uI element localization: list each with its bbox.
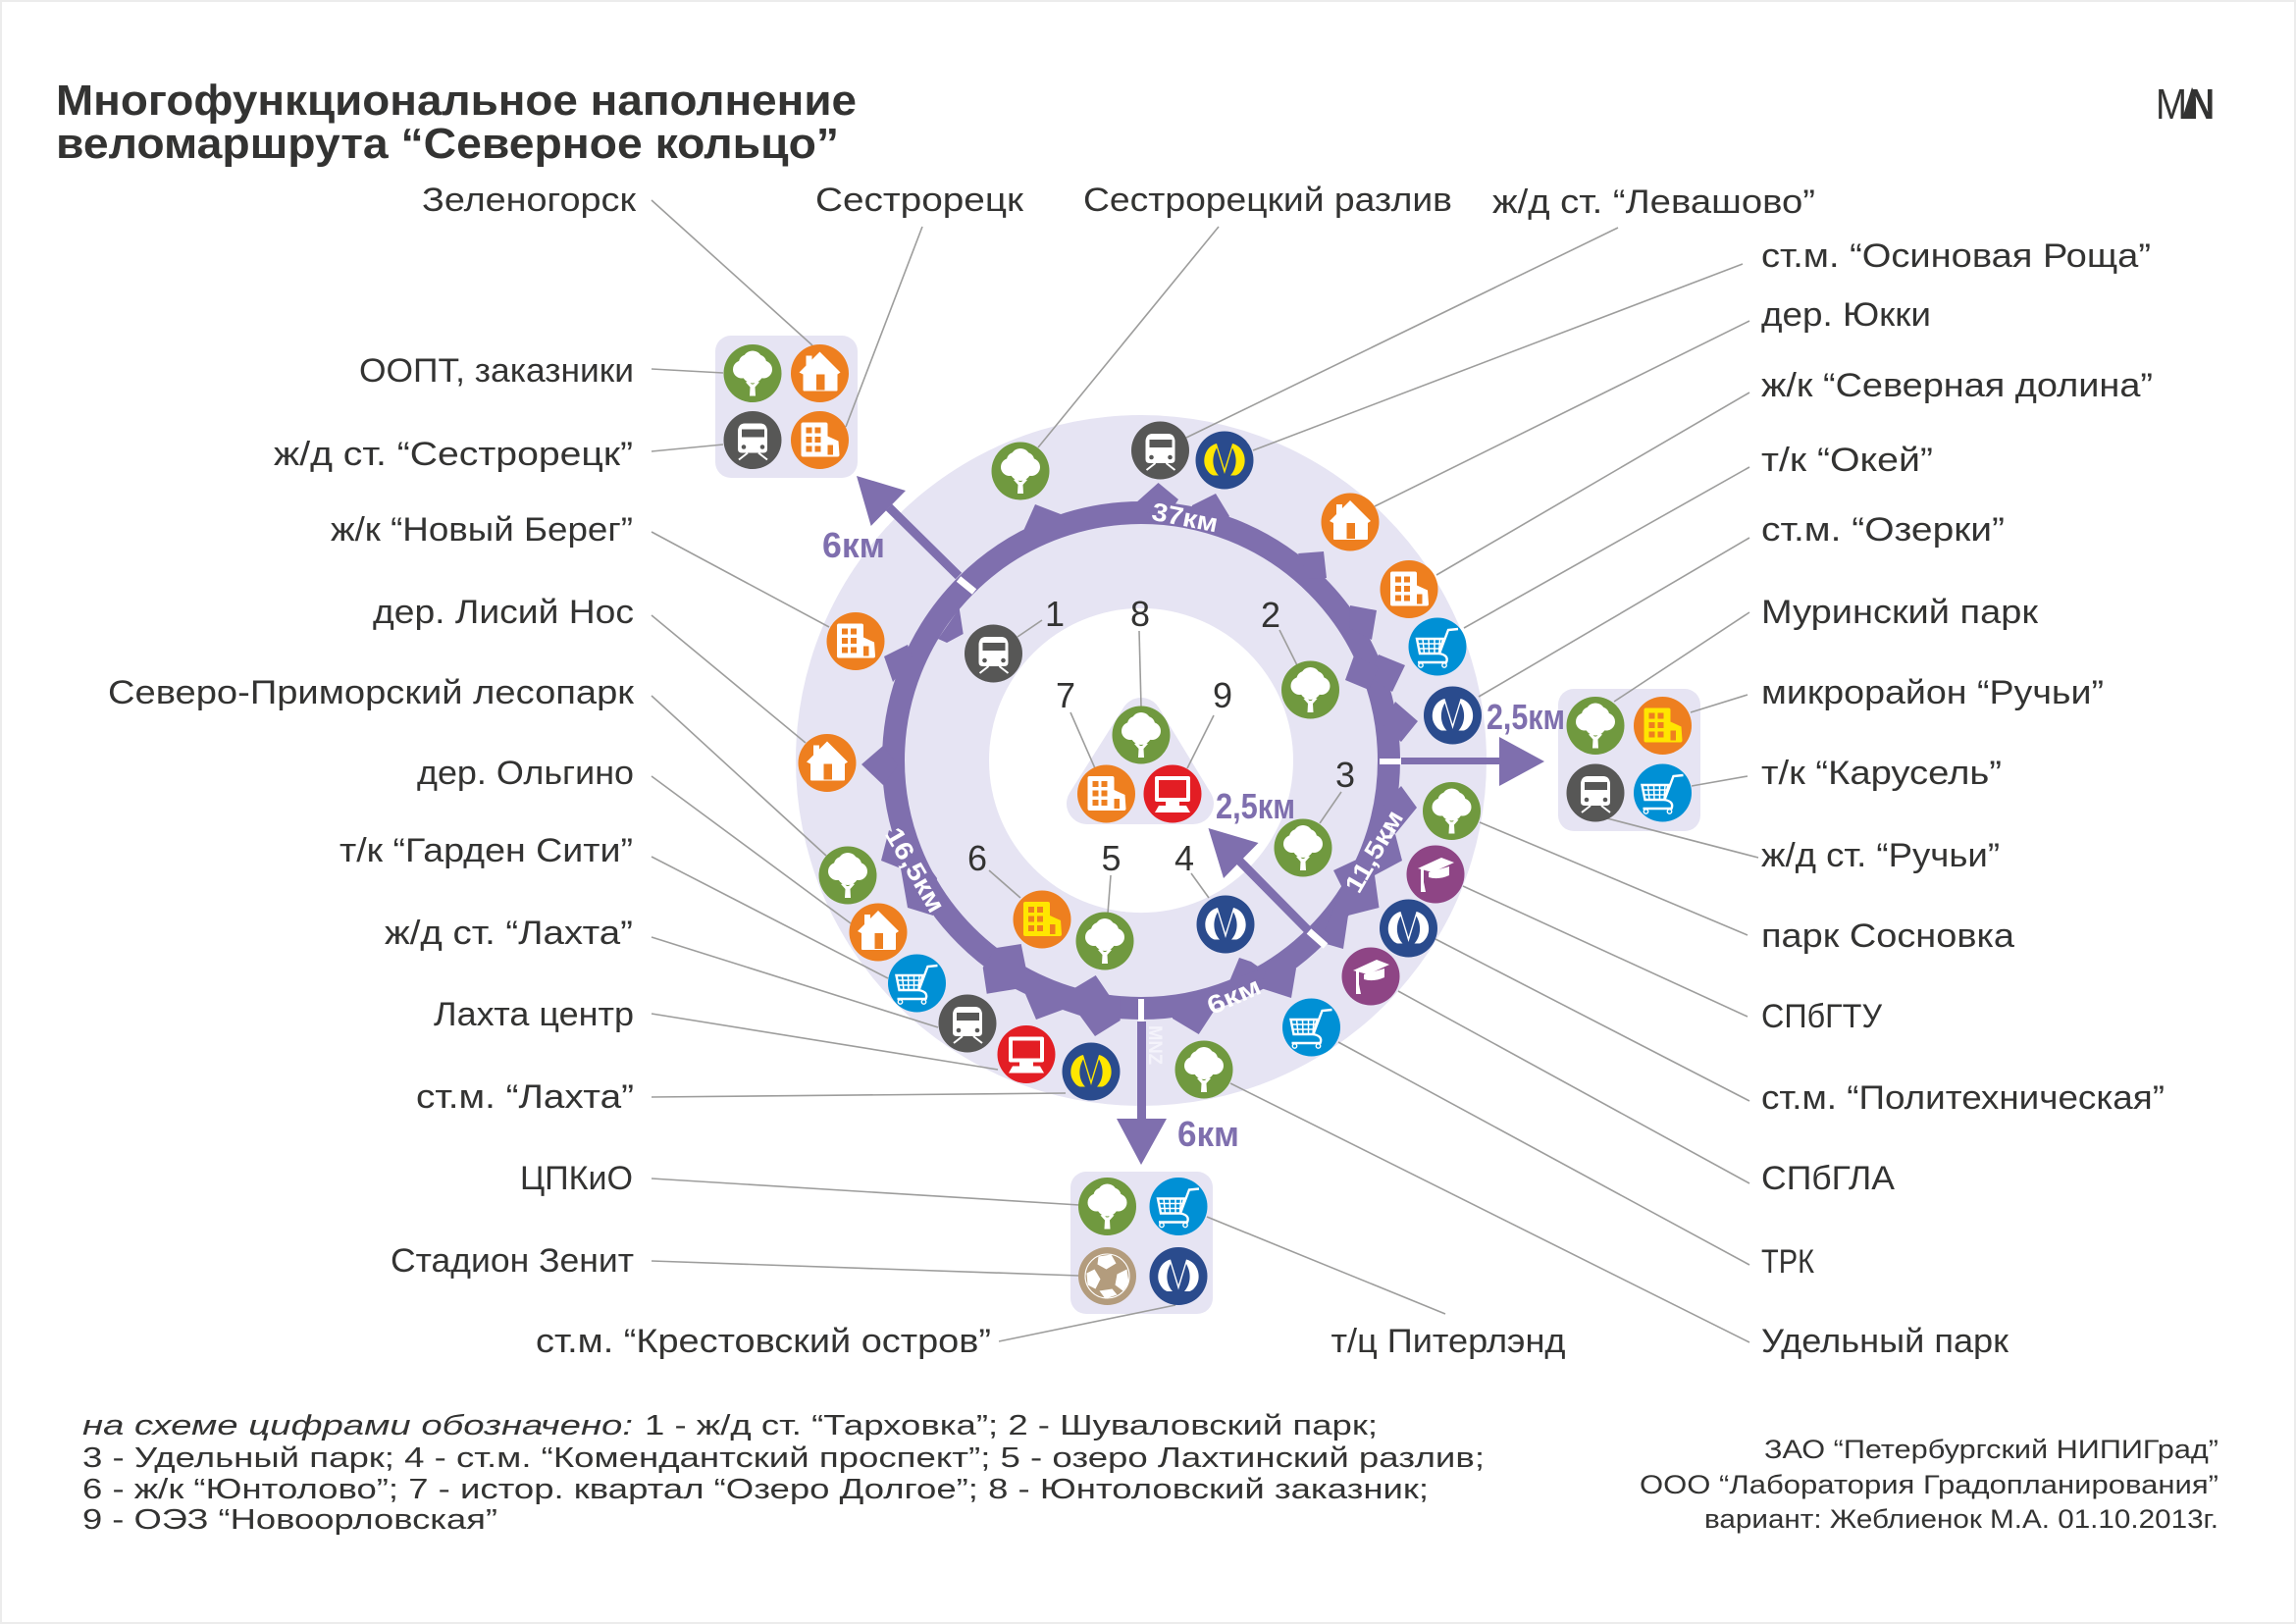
arrow: east 2,5 km: [1380, 737, 1544, 786]
distance labels on arrows: 6км: [1177, 1114, 1239, 1154]
route ring with teeth: [861, 483, 1418, 1036]
icon: building: [1634, 697, 1692, 755]
credits: ООО “Лаборатория Градопланирования”: [1640, 1470, 2218, 1499]
icons in panel south: [1078, 1178, 1207, 1305]
labels left and top: ЦПКиО: [520, 1160, 633, 1197]
panel: group south: [1070, 1172, 1213, 1314]
labels right: т/к “Карусель”: [1761, 755, 2002, 792]
icon: football: [1078, 1247, 1136, 1305]
labels right: дер. Юкки: [1761, 296, 1931, 334]
icon: metro, Озерки: [1424, 687, 1482, 744]
labels right: [1761, 237, 2165, 1360]
labels right: ж/д ст. “Ручьи”: [1761, 837, 2000, 874]
labels left and top: Сестрорецкий разлив: [1083, 182, 1452, 219]
icon: train: [724, 411, 781, 469]
icons in panel east: [1566, 697, 1692, 822]
icon: train, Лахта: [938, 995, 997, 1052]
inner numbers: [967, 594, 1355, 878]
credits: ЗАО “Петербургский НИПИГрад”: [1764, 1435, 2218, 1464]
title: [56, 77, 857, 168]
legend footnote: 9 - ОЭЗ “Новоорловская”: [82, 1504, 497, 1536]
inner numbers: 5: [1101, 838, 1122, 878]
inner numbers: 2: [1261, 595, 1280, 635]
labels left and top: ООПТ, заказники: [359, 352, 634, 390]
icon: cart, ТРК: [1282, 999, 1340, 1056]
panel: group east: [1558, 689, 1700, 831]
labels left and top: Стадион Зенит: [391, 1242, 634, 1280]
labels left and top: т/ц Питерлэнд: [1331, 1323, 1566, 1360]
labels left and top: Сестрорецк: [815, 182, 1024, 219]
icon: computer 9: [1144, 765, 1201, 822]
labels right: ТРК: [1761, 1243, 1814, 1281]
icon: tree 8: [1113, 707, 1170, 763]
icon: tree, Сестрорецкий разлив: [991, 442, 1050, 500]
icon: tree, Удельный парк: [1175, 1040, 1232, 1099]
icon: metro, Лахта: [1062, 1042, 1121, 1101]
panel: centre triangle: [1087, 718, 1193, 804]
icon: tree: [1566, 697, 1625, 755]
legend footnote: 1 - ж/д ст. “Тарховка”; 2 - Шуваловский парк;: [645, 1410, 1378, 1441]
icon: building 6: [1013, 891, 1071, 948]
labels right: ж/к “Северная долина”: [1761, 367, 2153, 404]
inner numbers: 6: [967, 838, 987, 878]
inner numbers: 7: [1056, 675, 1075, 715]
icon: house, Ольгино: [850, 903, 907, 962]
icon: building, Северная долина: [1380, 560, 1438, 618]
icons in panel north-west: [724, 344, 849, 469]
labels left and top: Северо-Приморский лесопарк: [108, 674, 635, 711]
icon: metro, Политехническая: [1380, 899, 1437, 958]
icon: tree 3: [1274, 818, 1332, 877]
inner numbers: 3: [1335, 755, 1355, 795]
arrow: north-west 6 km: [857, 476, 974, 592]
icon: graduation cap, СПбГЛА: [1342, 948, 1399, 1005]
icon: graduation cap, СПбГТУ: [1407, 846, 1464, 903]
icon: cart: [1634, 763, 1692, 822]
labels left and top: Лахта центр: [434, 996, 634, 1033]
icon: tree 2: [1281, 661, 1339, 718]
legend footnote: 3 - Удельный парк; 4 - ст.м. “Комендантский проспект”; 5 - озеро Лахтинский разлив;: [82, 1442, 1485, 1474]
labels left and top: Зеленогорск: [422, 182, 637, 219]
icon: cart, Гарден Сити: [888, 954, 946, 1013]
distance labels on the ring: [879, 497, 1409, 1065]
inner numbers: 9: [1213, 675, 1232, 715]
legend footnote: на схеме цифрами обозначено:: [82, 1410, 633, 1441]
logo MN: M: [2156, 80, 2187, 129]
labels left and top: ж/д ст. “Лахта”: [385, 915, 633, 952]
icon: tree: [724, 344, 781, 402]
ring diagram background disc: [796, 415, 1487, 1106]
icon: train, Левашово: [1131, 422, 1189, 479]
inner numbers: 1: [1045, 594, 1065, 634]
labels right: микрорайон “Ручьи”: [1761, 674, 2104, 711]
credits: [1640, 1435, 2218, 1534]
leader lines: [652, 200, 1758, 1342]
labels right: ст.м. “Осиновая Роща”: [1761, 237, 2151, 275]
labels right: СПбГТУ: [1761, 998, 1882, 1035]
distance labels on arrows: 6км: [822, 525, 885, 565]
icon: train: [1566, 763, 1625, 822]
icon: tree 5: [1075, 913, 1134, 969]
labels left and top: т/к “Гарден Сити”: [339, 832, 633, 869]
labels left and top: дер. Ольгино: [417, 755, 634, 792]
panel: group north-west: [715, 336, 858, 478]
icons on the outer ring: [799, 422, 1482, 1101]
arrow: inner 2,5 km: [1209, 828, 1326, 946]
inner numbers: 4: [1174, 838, 1194, 878]
labels right: СПбГЛА: [1761, 1160, 1895, 1197]
labels right: Удельный парк: [1761, 1323, 2009, 1360]
labels right: ст.м. “Озерки”: [1761, 511, 2005, 549]
icon: tree: [1078, 1178, 1136, 1235]
icons on the inner ring: [965, 624, 1339, 969]
title: Многофункциональное наполнение: [56, 77, 857, 125]
labels left and top: ж/д ст. “Левашово”: [1492, 183, 1815, 221]
labels left and top: дер. Лисий Нос: [373, 594, 634, 631]
labels left and top: ж/к “Новый Берег”: [331, 511, 633, 549]
logo MN: [2156, 80, 2215, 129]
icon: metro, Осиновая Роща: [1195, 432, 1254, 489]
legend footnote: [82, 1410, 1485, 1536]
icon: metro 4: [1197, 895, 1254, 954]
labels left and top: ст.м. “Лахта”: [416, 1078, 634, 1116]
icon: building, Новый Берег: [826, 612, 885, 670]
labels right: парк Сосновка: [1761, 917, 2014, 955]
icon: computer, Лахта центр: [997, 1025, 1056, 1083]
icon: train 1: [965, 624, 1022, 683]
distance labels on arrows: [822, 525, 1565, 1154]
icon: cart: [1150, 1178, 1207, 1235]
logo MN: N: [2189, 80, 2215, 129]
icon: building: [791, 411, 849, 469]
distance labels on the ring: 6км: [1202, 970, 1265, 1021]
icon: house, Лисий Нос: [799, 734, 856, 792]
distance labels on the ring: 11,5км: [1338, 805, 1409, 898]
labels right: ст.м. “Политехническая”: [1761, 1079, 2165, 1117]
icon: tree, Северо-Приморский лесопарк: [818, 846, 877, 905]
icon: cart, Окей: [1409, 618, 1466, 675]
distance labels on arrows: 2,5км: [1216, 786, 1295, 826]
icon: house: [791, 344, 849, 402]
labels left and top: [108, 182, 1815, 1360]
title: веломаршрута “Северное кольцо”: [56, 120, 839, 168]
distance labels on arrows: 2,5км: [1487, 697, 1565, 737]
distance labels on the ring: MNZ: [1144, 1025, 1165, 1065]
arrow: south 6 km: [1117, 999, 1167, 1165]
credits: вариант: Жеблиенок М.А. 01.10.2013г.: [1704, 1504, 2218, 1534]
distance labels on the ring: 16,5км: [879, 822, 952, 917]
inner numbers: 8: [1130, 594, 1150, 634]
labels right: т/к “Окей”: [1761, 442, 1933, 479]
icon: tree, парк Сосновка: [1423, 782, 1481, 840]
icon: house, Юкки: [1321, 493, 1380, 551]
legend footnote: 6 - ж/к “Юнтолово”; 7 - истор. квартал “Озеро Долгое”; 8 - Юнтоловский заказник;: [82, 1474, 1429, 1505]
labels left and top: ст.м. “Крестовский остров”: [536, 1323, 991, 1360]
icon: metro: [1150, 1247, 1207, 1305]
labels left and top: ж/д ст. “Сестрорецк”: [274, 436, 633, 473]
distance labels on the ring: 37км: [1149, 497, 1221, 538]
icon: building 7: [1077, 765, 1135, 822]
labels right: Муринский парк: [1761, 594, 2039, 631]
